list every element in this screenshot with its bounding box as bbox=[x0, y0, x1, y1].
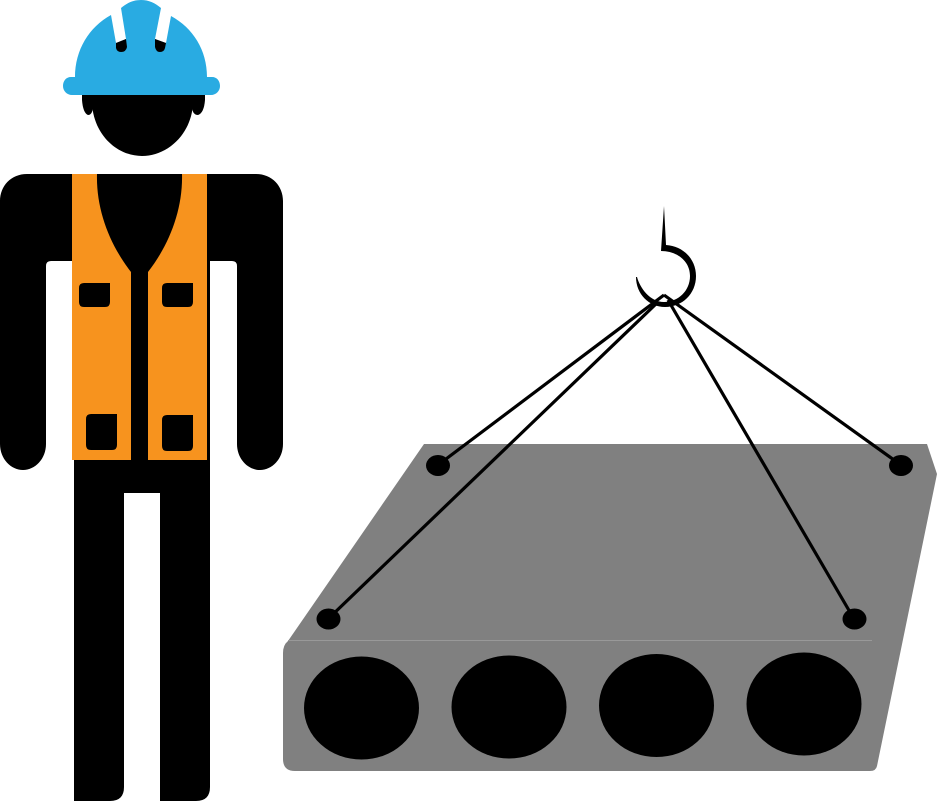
figure: hollow-core concrete slab bbox=[283, 444, 937, 771]
lifting cables bbox=[328, 295, 901, 619]
figure: construction worker bbox=[0, 0, 283, 801]
icon: trousers bbox=[74, 460, 210, 801]
icon: high-visibility vest bbox=[72, 174, 207, 460]
icon: crane hook bbox=[636, 206, 696, 307]
slab top and side face bbox=[283, 444, 937, 771]
icon: torso and arms bbox=[0, 174, 283, 470]
lifting points bbox=[316, 455, 913, 630]
slab hollow core openings bbox=[304, 652, 862, 760]
icon: head and ears bbox=[82, 90, 205, 156]
icon: hard hat bbox=[63, 0, 220, 95]
vest pockets bbox=[79, 283, 193, 451]
